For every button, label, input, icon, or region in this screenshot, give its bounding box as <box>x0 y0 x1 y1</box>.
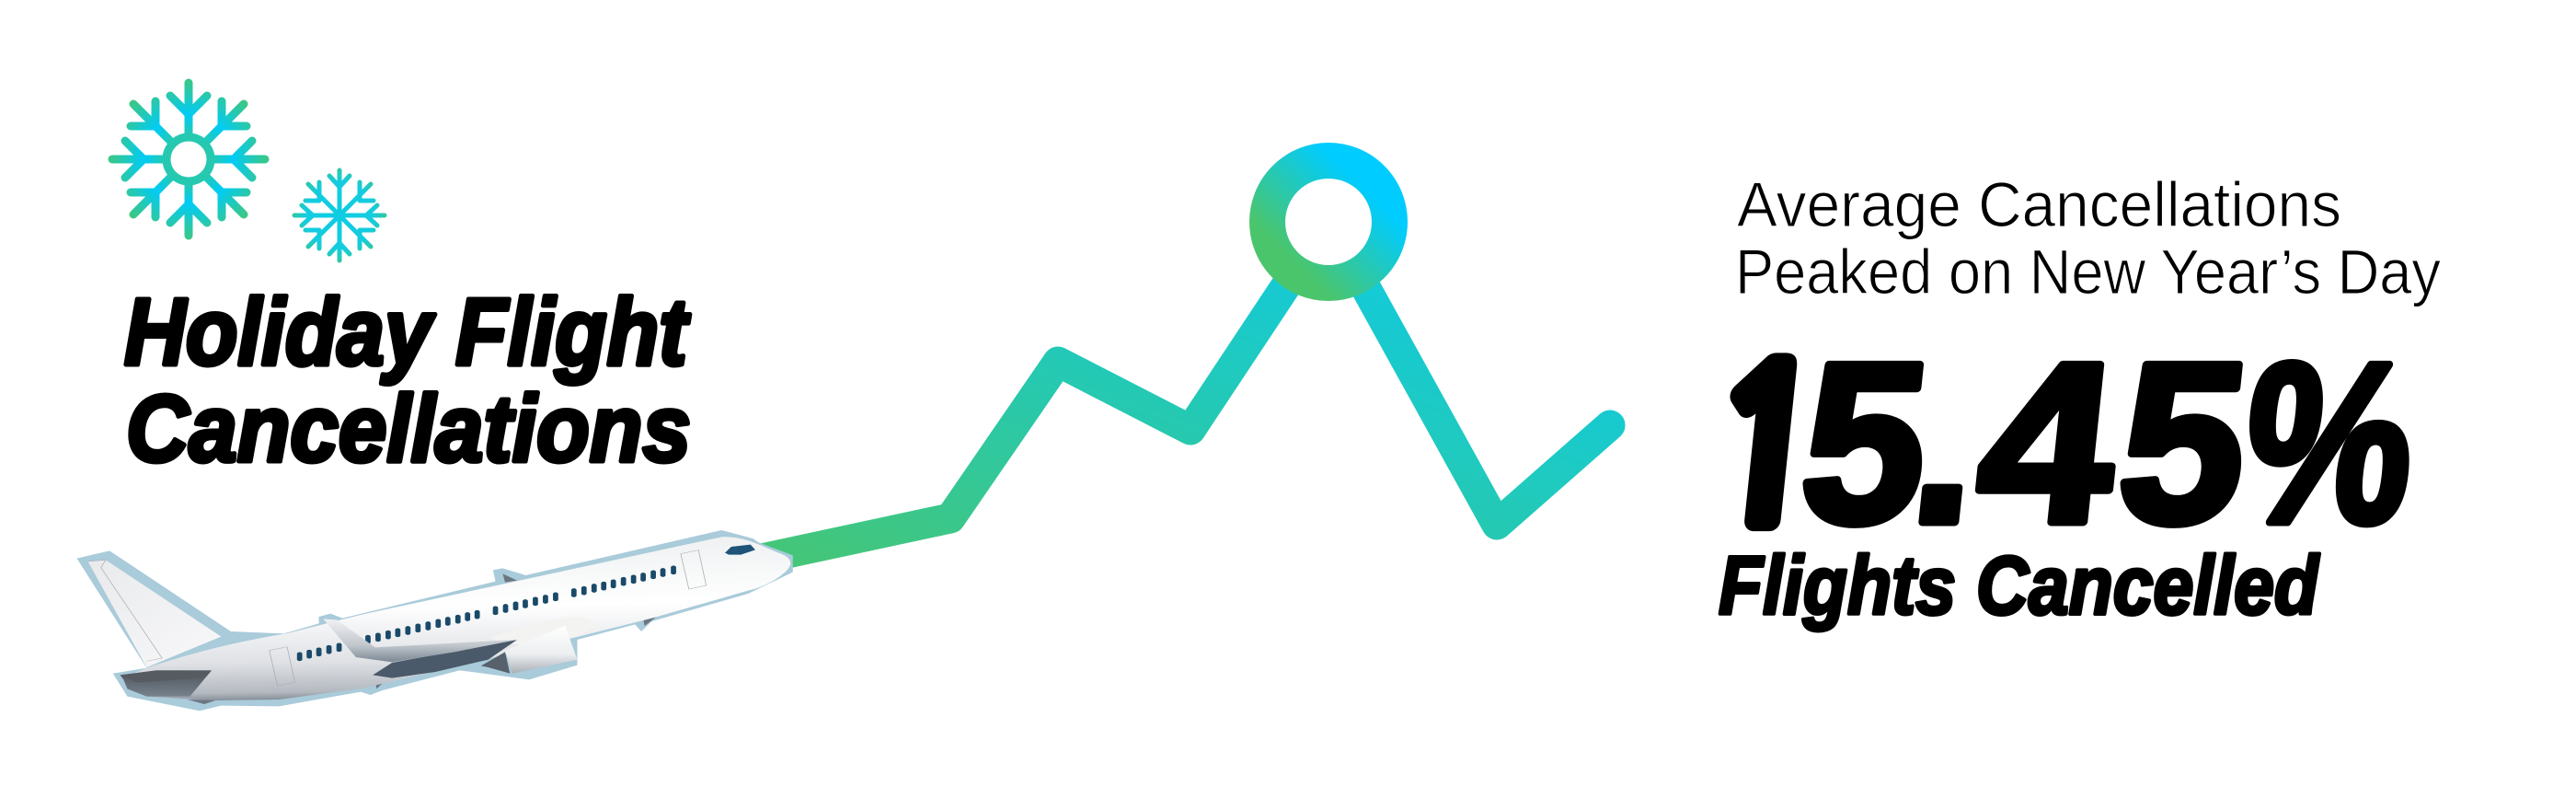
tailplane top <box>121 670 212 683</box>
big number: . <box>1902 316 1993 571</box>
big number: 1 <box>1696 345 1834 554</box>
fuselage <box>122 537 790 700</box>
airplane halo <box>77 530 793 711</box>
tailplane <box>121 670 212 697</box>
engine <box>505 626 577 674</box>
big number: % <box>2232 316 2427 571</box>
big number: 4 <box>1967 316 2129 571</box>
big number: 5 <box>1790 316 1940 571</box>
wing root fairing <box>489 616 602 644</box>
illustration: airplane <box>77 530 793 711</box>
peak marker ring <box>1268 160 1389 284</box>
heading: peak description <box>1735 169 2441 307</box>
heading line 1: Average Cancellations <box>1737 169 2341 240</box>
icon: small snowflake <box>294 170 385 260</box>
windows <box>300 567 673 659</box>
tail fin <box>88 560 221 667</box>
icon: large snowflake <box>112 83 265 236</box>
line chart: cancellations trend <box>736 241 1610 564</box>
wing <box>323 619 517 662</box>
big number: 5 <box>2108 316 2260 571</box>
dorsal fins <box>188 573 656 704</box>
heading line 2: Peaked on New Year’s Day <box>1735 237 2441 307</box>
wing underside <box>373 640 517 678</box>
title <box>124 279 691 481</box>
big number <box>1695 316 2427 571</box>
label: flights cancelled: Flights Cancelled <box>1719 540 2320 632</box>
cockpit window <box>725 545 755 555</box>
title line 2: Cancellations <box>126 376 691 481</box>
engine fan <box>481 652 510 674</box>
title line 1: Holiday Flight <box>124 279 690 385</box>
door outlines <box>88 550 707 686</box>
